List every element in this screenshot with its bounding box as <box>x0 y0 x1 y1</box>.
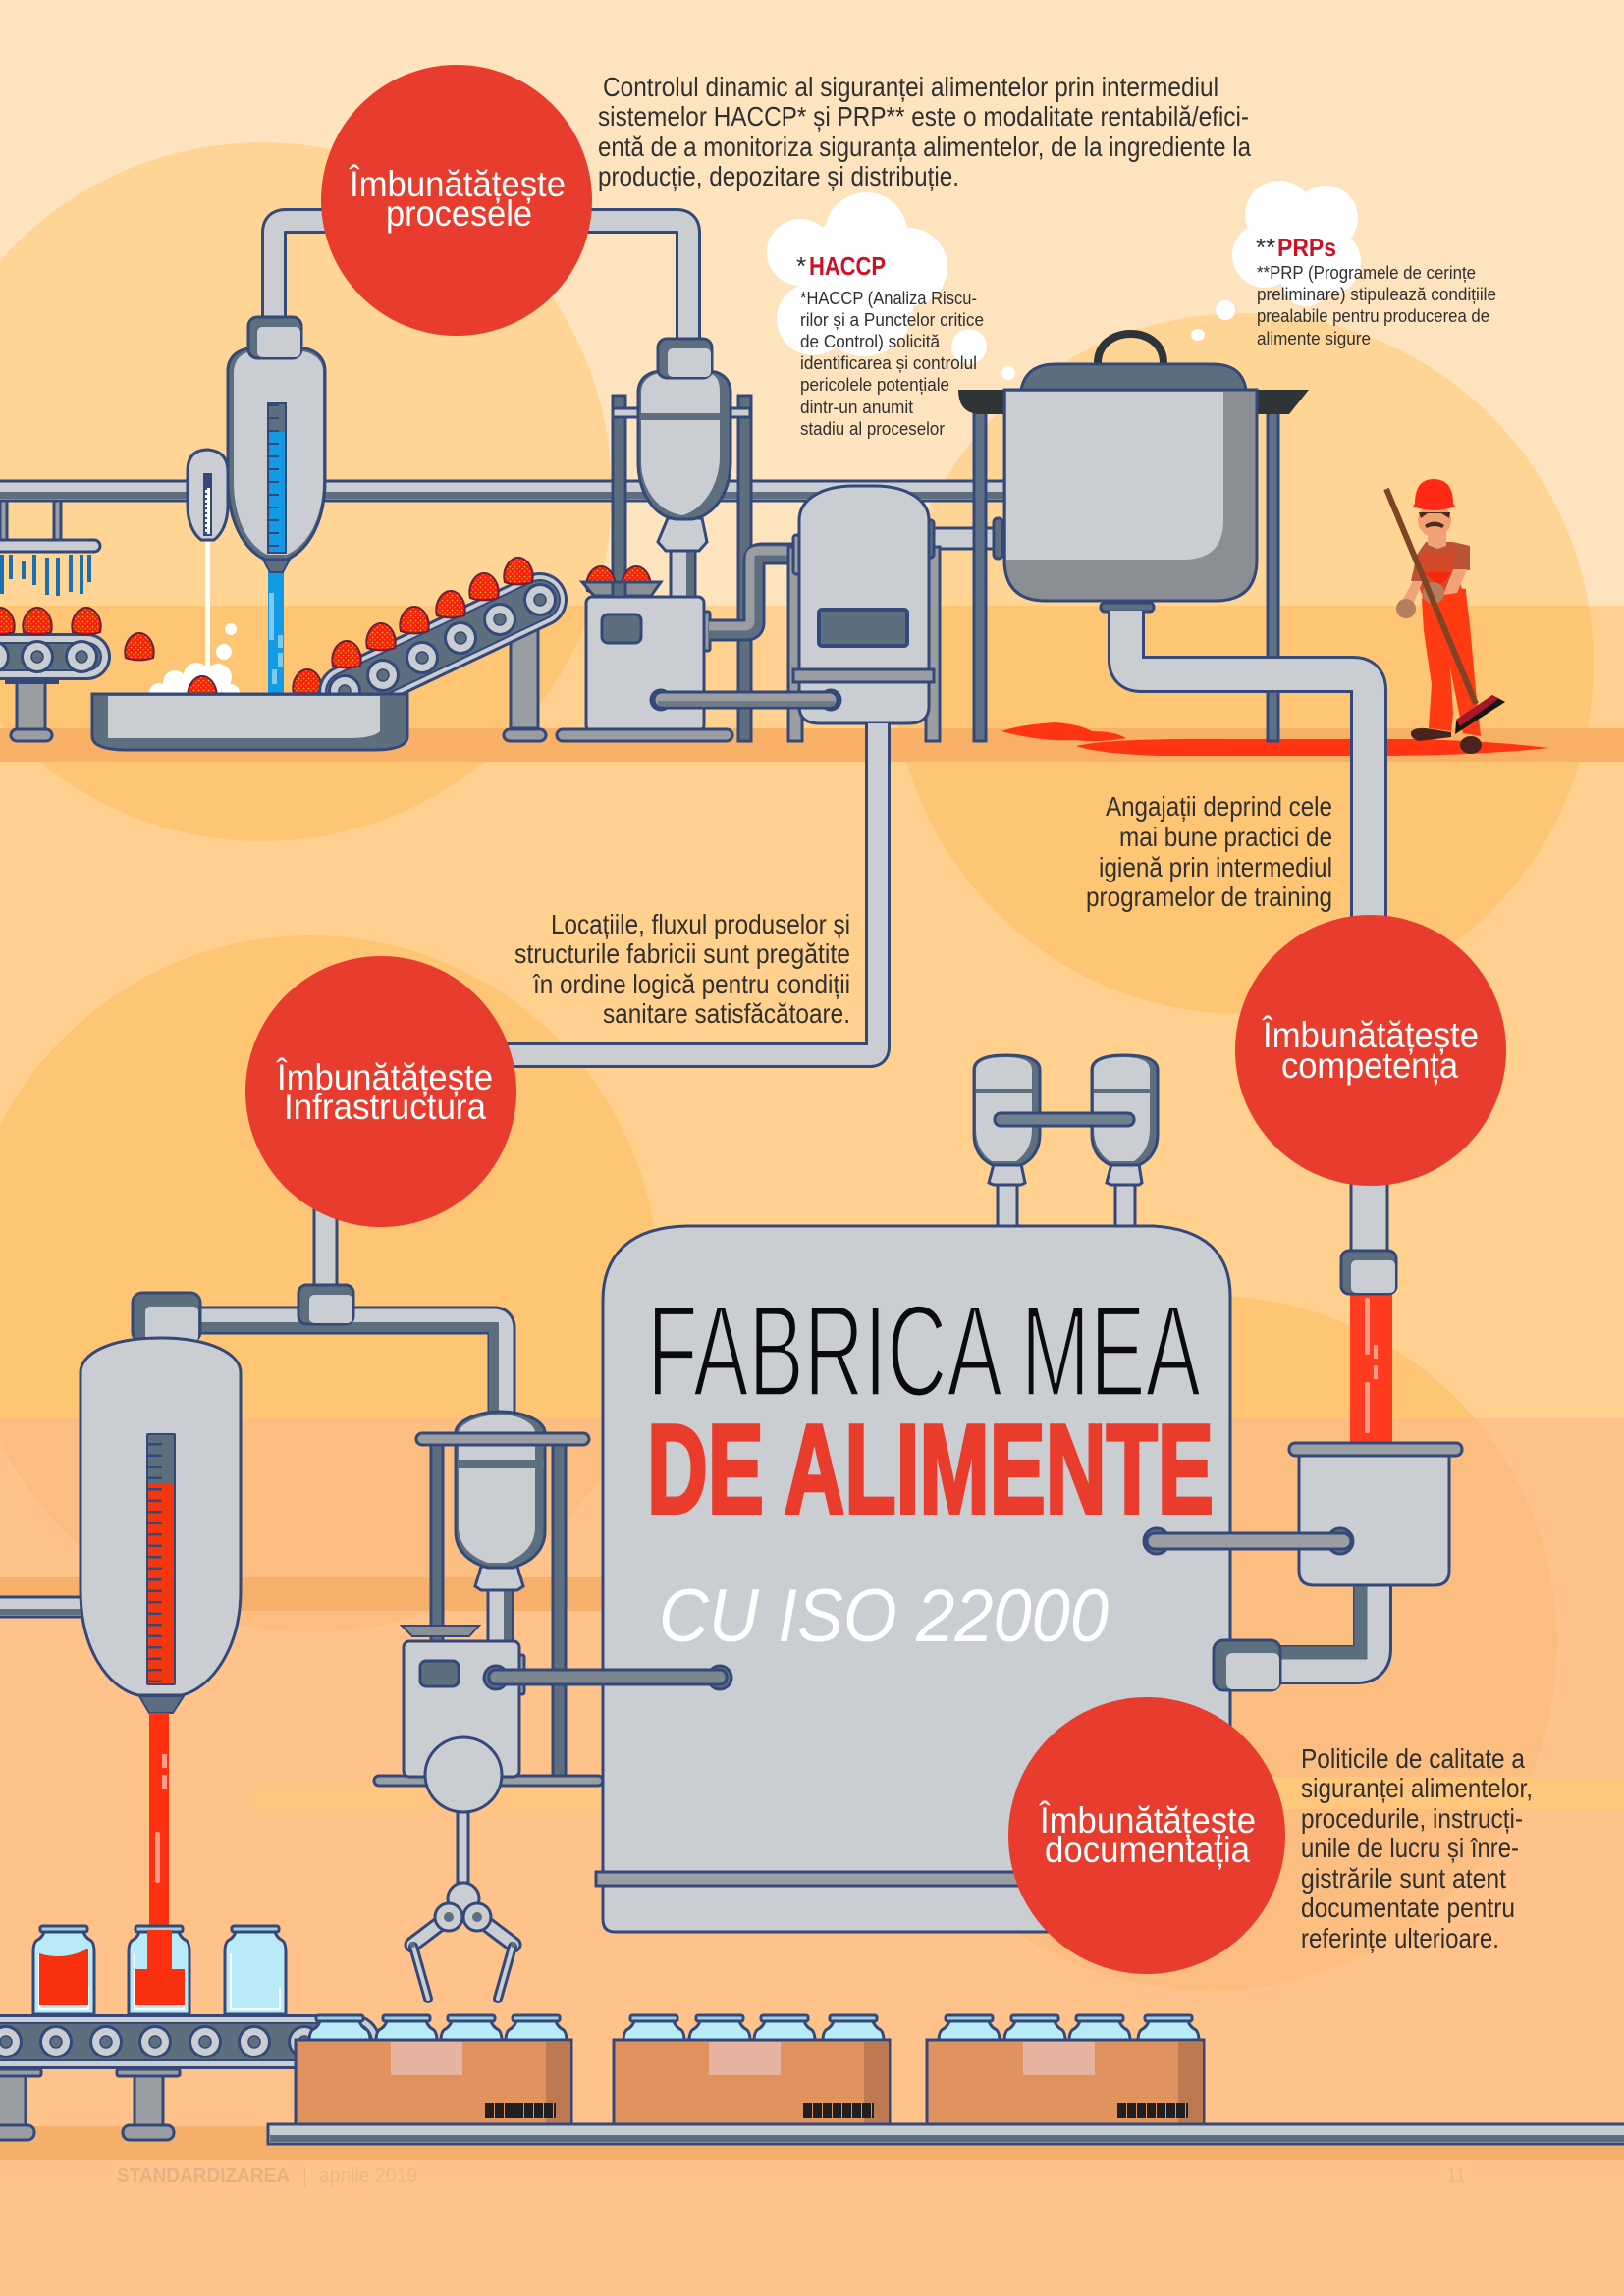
text block: employees training: Angajații deprind cele <box>1106 791 1332 822</box>
text block: HACCP note: HACCP <box>809 251 886 281</box>
text block: process control: Controlul dinamic al siguranței alimentelor prin intermediul <box>603 72 1218 102</box>
arm stem <box>458 1812 468 1883</box>
text block: documentation policies: procedurile, instrucți- <box>1301 1803 1523 1834</box>
main title: DE ALIMENTE <box>647 1399 1214 1540</box>
text block: HACCP note <box>796 251 984 439</box>
worker: broom <box>1386 489 1505 734</box>
red liquid into jar <box>149 1713 169 2012</box>
coupling at main tank <box>1214 1640 1280 1690</box>
left twin tank <box>974 1055 1040 1165</box>
circle: competence <box>1235 915 1506 1186</box>
main title: FABRICA MEA <box>647 1279 1201 1424</box>
left big tank with red gauge <box>0 1293 241 1713</box>
text block: factory locations <box>514 909 850 1029</box>
connecting bar <box>995 1113 1134 1126</box>
robotic claw <box>409 1883 516 1999</box>
pipe: bucket to main tank <box>1267 1580 1373 1665</box>
funnel stem <box>488 1590 513 1643</box>
hopper plate <box>402 1626 479 1636</box>
worker: shoes <box>1411 728 1482 754</box>
pipe: boiler down to infrastructure circle <box>491 723 878 1055</box>
right twin tank <box>1092 1055 1158 1165</box>
boxed jars group 2 <box>614 2015 890 2125</box>
second tank in frame <box>613 339 751 741</box>
circle: competence: competența <box>1281 1045 1458 1086</box>
footer: publication and page number <box>117 2165 1466 2187</box>
text block: employees training: igienă prin intermediul <box>1099 852 1332 882</box>
cloud: HACCP <box>767 192 1015 380</box>
jar being filled <box>129 1926 189 2014</box>
pipe: infrastructure circle to tanks <box>200 1202 502 1414</box>
worker: head <box>1428 530 1446 549</box>
bottom floor rail <box>268 2124 1624 2144</box>
left conveyor with strawberries <box>0 608 154 741</box>
bottom conveyor <box>0 2014 381 2140</box>
pipe: feeder to boiler <box>709 551 797 630</box>
circle: processes <box>321 65 592 336</box>
circle: processes: procesele <box>386 193 532 234</box>
shower bar with water drops <box>0 501 100 596</box>
pipe: pot down to competence circle <box>1126 611 1369 933</box>
footer: publication and page number: aprilie 2019 <box>319 2165 417 2187</box>
main title: CU ISO 22000 <box>659 1575 1109 1658</box>
pipe: competence circle to bucket <box>1341 1178 1396 1444</box>
main tank <box>596 1226 1230 1932</box>
text block: PRPs note: ** <box>1256 233 1275 262</box>
joint ball <box>425 1737 502 1812</box>
text block: PRPs note: preliminare) stipulează condițiile <box>1257 284 1496 304</box>
small twin tanks on top of main tank <box>974 1055 1158 1228</box>
text block: HACCP note: rilor și a Punctelor critice <box>800 309 984 330</box>
text block: factory locations: Locațiile, fluxul produselor și <box>551 909 850 939</box>
text block: HACCP note: identificarea și controlul <box>800 352 977 373</box>
jars on conveyor <box>33 1926 286 2014</box>
text block: documentation policies: gistrările sunt atent <box>1301 1863 1506 1894</box>
footer: publication and page number: STANDARDIZAREA <box>117 2165 290 2187</box>
text block: employees training: mai bune practici de <box>1119 822 1332 852</box>
handle pipe: filler to main tank <box>484 1666 731 1689</box>
handle pipe: feeder to boiler <box>651 690 840 710</box>
red liquid into bucket <box>1350 1294 1392 1444</box>
inclined conveyor with strawberries <box>293 558 557 741</box>
text block: documentation policies: Politicile de calitate a <box>1301 1743 1525 1774</box>
text block: factory locations: structurile fabricii sunt pregătite <box>514 938 850 969</box>
circle: documentation <box>1008 1697 1285 1974</box>
text block: documentation policies: referințe ulterioare. <box>1301 1923 1499 1953</box>
handle pipe: main tank to bucket <box>1144 1443 1462 1585</box>
circle: documentation: documentația <box>1045 1830 1250 1870</box>
worker: arms and hands <box>1402 581 1423 607</box>
text block: HACCP note: stadiu al proceselor <box>800 418 945 439</box>
stems <box>998 1185 1017 1228</box>
circle: infrastructure <box>245 956 516 1227</box>
text block: process control: sistemelor HACCP* și PRP** este o modalitate rentabilă/efici- <box>598 101 1249 132</box>
circle: infrastructure: Îmbunătățește <box>276 1057 493 1097</box>
worker: torso <box>1411 542 1470 594</box>
text block: PRPs note: prealabile pentru producerea de <box>1257 305 1489 326</box>
worker: helmet <box>1413 479 1455 510</box>
text block: PRPs note: **PRP (Programele de cerințe <box>1257 262 1476 283</box>
text block: factory locations: sanitare satisfăcătoare. <box>603 998 850 1029</box>
boiler machine <box>788 486 940 741</box>
main title <box>647 1279 1214 1658</box>
circle: competence: Îmbunătățește <box>1262 1015 1479 1055</box>
text block: process control <box>598 72 1251 191</box>
text block: documentation policies <box>1301 1743 1533 1953</box>
text block: employees training: programelor de training <box>1086 881 1332 912</box>
text block: PRPs note: alimente sigure <box>1257 328 1371 348</box>
text block: employees training <box>1086 791 1332 912</box>
posts <box>431 1445 443 1643</box>
text block: HACCP note: *HACCP (Analiza Riscu- <box>800 288 977 308</box>
pipe: tanks to process circle <box>274 221 688 344</box>
red gauge <box>146 1433 176 1685</box>
circle: infrastructure: Infrastructura <box>284 1087 486 1127</box>
text block: HACCP note: * <box>796 251 806 281</box>
big tank with blue gauge <box>228 317 325 572</box>
cloud: PRPs <box>1191 181 1361 341</box>
text block: factory locations: în ordine logică pentru condiții <box>532 969 850 999</box>
text block: process control: producție, depozitare și distribuție. <box>598 161 959 191</box>
base bar <box>374 1776 603 1786</box>
boxed jars group 1 <box>296 2015 571 2125</box>
circle: documentation: Îmbunătățește <box>1039 1800 1256 1841</box>
footer: publication and page number: 11 <box>1446 2165 1466 2187</box>
boxed jars group 3 <box>927 2015 1204 2125</box>
washing pan <box>92 694 407 750</box>
jar partly filled <box>33 1926 94 2014</box>
worker sweeping <box>1386 479 1505 754</box>
text block: process control: entă de a monitoriza siguranța alimentelor, de la ingrediente la <box>598 132 1251 162</box>
machine body <box>404 1641 519 1777</box>
main horizontal pipe <box>0 481 1006 501</box>
feeder machine with hopper <box>557 566 732 741</box>
filler machine <box>374 1412 603 1883</box>
small tank with gauge <box>188 450 228 540</box>
text block: documentation policies: siguranței alimentelor, <box>1301 1773 1533 1803</box>
red spill on the floor <box>1001 722 1549 756</box>
text block: documentation policies: unile de lucru și înre- <box>1301 1833 1519 1863</box>
empty jar <box>225 1926 286 2014</box>
text block: HACCP note: dintr-un anumit <box>800 397 913 417</box>
milk stream and foam <box>149 542 240 703</box>
text block: HACCP note: de Control) solicită <box>800 331 941 351</box>
text block: PRPs note: PRPs <box>1277 233 1336 262</box>
worker: legs <box>1422 592 1481 736</box>
text block: documentation policies: documentate pentru <box>1301 1893 1515 1923</box>
filler vessel <box>456 1412 545 1568</box>
pipe: pot drain to boiler side <box>928 518 1006 559</box>
text block: HACCP note: pericolele potențiale <box>800 374 949 395</box>
circle: processes: Îmbunătățește <box>349 164 566 204</box>
cooking pot <box>958 334 1309 741</box>
text block: PRPs note <box>1256 233 1496 348</box>
water stream <box>268 569 284 694</box>
blue gauge <box>267 402 287 554</box>
